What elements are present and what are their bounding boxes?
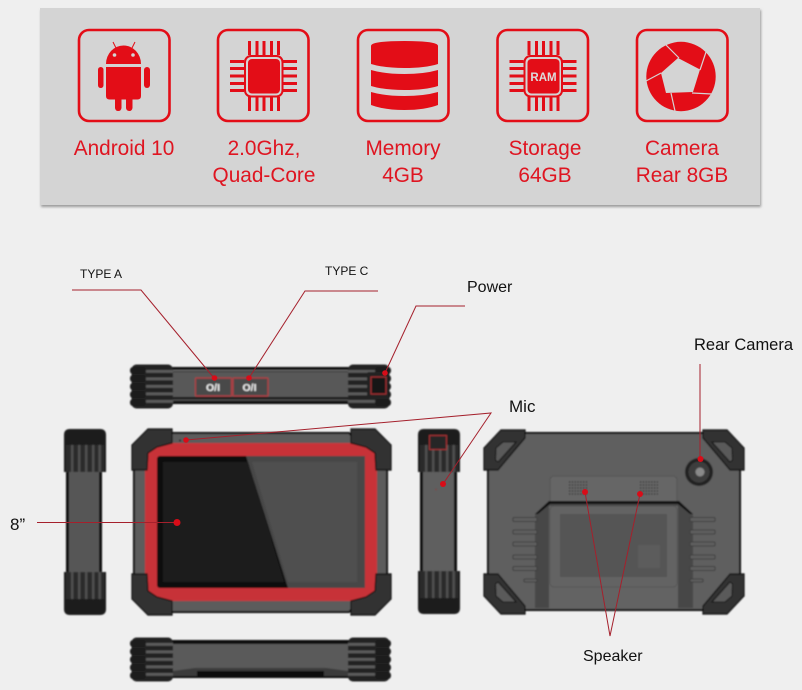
callout: screen size: 8”	[10, 515, 25, 534]
label: camera: Rear 8GB	[636, 164, 728, 187]
callout: Rear Camera	[694, 336, 794, 462]
callout: TYPE C: TYPE C	[325, 264, 369, 278]
label: Android 10: Android 10	[74, 137, 174, 160]
rubber corners	[132, 429, 391, 615]
callout: Mic	[183, 397, 536, 487]
label: storage: Storage	[509, 137, 581, 160]
callout: screen size	[10, 515, 180, 534]
top edge: USB ports: O/I	[242, 382, 257, 394]
panel: specifications	[40, 8, 761, 207]
icon: ram chip: RAM	[530, 72, 557, 84]
speaker grilles	[569, 482, 658, 494]
icon: android	[79, 30, 170, 121]
callout: TYPE A: TYPE A	[80, 267, 122, 281]
device: bottom edge view	[130, 638, 391, 682]
label: processor: 2.0Ghz,	[228, 137, 300, 160]
callout: TYPE A	[72, 267, 217, 381]
side power button	[430, 436, 446, 450]
device: left side view	[64, 429, 106, 615]
callout: TYPE C	[246, 264, 378, 381]
device: back view	[484, 430, 744, 614]
kickstand recess	[535, 476, 693, 608]
rear corners	[484, 430, 744, 614]
device: right side view	[418, 429, 460, 614]
red bezel	[145, 443, 377, 601]
icon: memory database	[358, 30, 448, 121]
device: front view	[132, 429, 391, 615]
label: memory: Memory	[365, 137, 441, 160]
top edge: USB ports: O/I	[206, 382, 220, 394]
icon: processor	[218, 30, 308, 121]
rear camera lens	[685, 458, 713, 486]
top edge: power button	[367, 372, 388, 398]
callout: Power	[382, 279, 513, 376]
vents	[513, 518, 715, 582]
callout: Speaker: Speaker	[583, 648, 643, 665]
label: camera: Camera	[645, 137, 719, 160]
callout: Speaker	[582, 489, 643, 665]
icon: camera shutter	[637, 30, 728, 121]
callout: Rear Camera: Rear Camera	[694, 336, 794, 354]
label: memory: 4GB	[382, 164, 424, 187]
callout: Mic: Mic	[509, 397, 536, 416]
top edge: USB ports	[196, 378, 268, 396]
callout: Power: Power	[467, 279, 513, 296]
icon: ram chip	[498, 30, 588, 121]
device: top edge view	[130, 364, 391, 408]
screen	[157, 456, 365, 588]
label: storage: 64GB	[518, 164, 572, 187]
label: processor: Quad-Core	[213, 164, 315, 187]
